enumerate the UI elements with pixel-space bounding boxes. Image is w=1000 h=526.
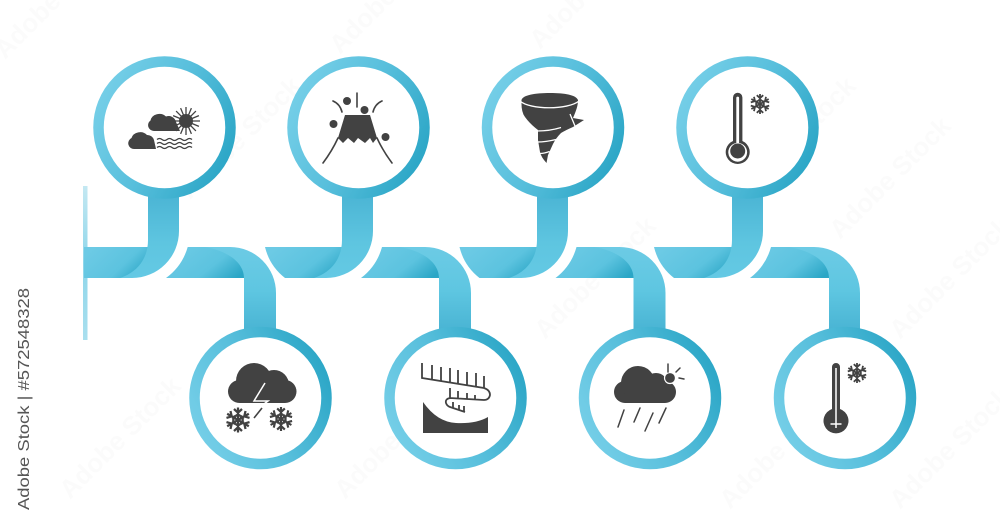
connector 2: down to bottom node [166, 247, 276, 335]
icon: avalanche slope [422, 363, 490, 433]
node 5: thunder snow [194, 332, 326, 464]
connector 7: up to top node [654, 190, 763, 278]
connector 3: up to top node [265, 190, 373, 278]
node 3: tornado [487, 62, 619, 194]
faint stock watermarks: Adobe Stock [823, 110, 957, 244]
connector 5: up to top node [460, 190, 568, 278]
rotated stock credit: Adobe Stock | #572548328 [16, 288, 33, 510]
icon: clouds, sun and haze [128, 107, 200, 149]
node 6: avalanche [390, 332, 522, 464]
node 8: freezing thermometer [779, 332, 911, 464]
faint stock watermarks: Adobe Stock [53, 370, 187, 504]
node 2: volcano [292, 62, 424, 194]
start rail [83, 186, 88, 340]
icon: storm cloud with snowflakes [225, 363, 296, 432]
connector 1: up to top node [84, 190, 179, 278]
faint stock watermarks: Adobe Stock [728, 70, 862, 204]
icon: thermometer and snowflake [726, 93, 770, 164]
icon: thermometer with plus and snowflake [823, 363, 867, 433]
node 7: rain and sun [584, 332, 716, 464]
icon: tornado funnel [520, 93, 584, 163]
faint stock watermarks: Adobe Stock [328, 370, 462, 504]
icon: erupting volcano [323, 93, 392, 163]
connector 8: down to bottom node [750, 247, 860, 335]
faint stock watermarks: Adobe Stock [173, 70, 307, 204]
connector 6: down to bottom node [556, 247, 666, 335]
faint stock watermarks: Adobe Stock [528, 210, 662, 344]
connector 4: down to bottom node [361, 247, 471, 335]
faint stock watermarks: Adobe Stock [713, 380, 847, 514]
node 1: fog, clouds and sun [98, 62, 230, 194]
icon: rain cloud with sun [614, 364, 684, 431]
node 4: cold thermometer [682, 62, 814, 194]
